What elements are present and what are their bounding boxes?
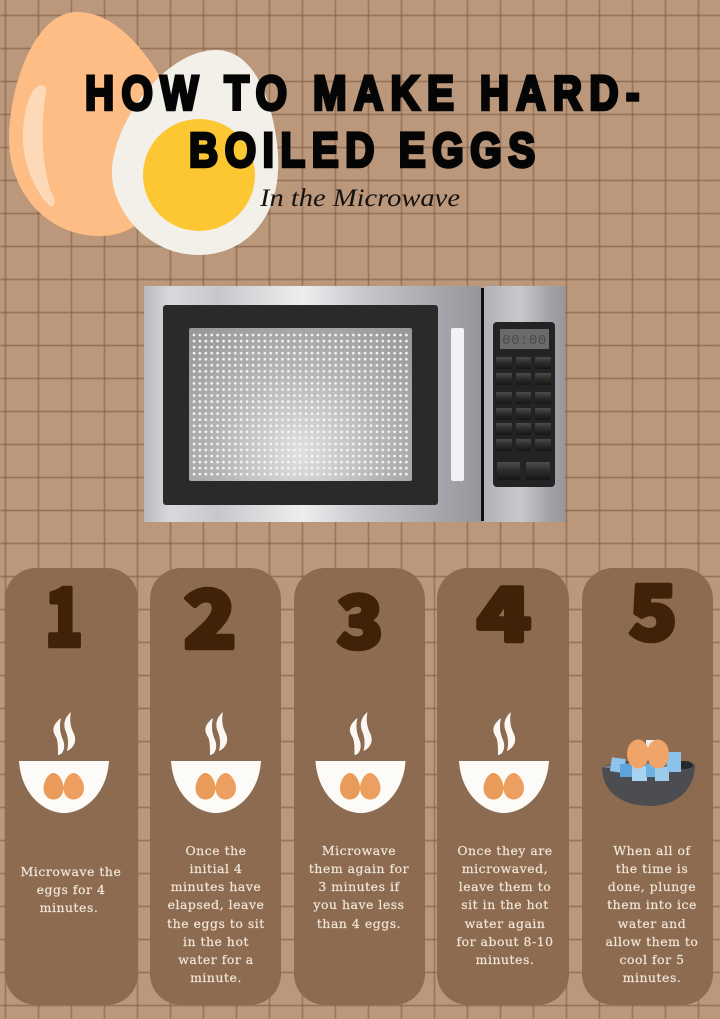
step 2 text: minutes have (171, 879, 261, 894)
step 4 text: Once they are (457, 843, 553, 858)
number 3: 3 (337, 564, 383, 669)
panel: step 4 (437, 556, 569, 1005)
microwave control panel: 00:00 (502, 333, 547, 349)
step 5 text: When all of (613, 843, 692, 858)
step 3 text: them again for (309, 861, 409, 876)
title (85, 67, 639, 177)
microwave door window (163, 305, 438, 505)
panel: step 1 (5, 554, 138, 1005)
step 5 text: allow them to (606, 934, 698, 949)
step 2 text: in the hot (183, 934, 249, 949)
step 5 text: cool for 5 (619, 952, 685, 967)
subtitle: In the Microwave (259, 183, 460, 212)
panel: step 5 (582, 552, 713, 1005)
microwave control panel (493, 322, 555, 487)
step 2 text: elapsed, leave (168, 897, 264, 912)
icon: bowl with eggs (19, 712, 109, 813)
icon: bowl with eggs (316, 712, 406, 813)
step 4 text: sit in the hot (461, 897, 549, 912)
number 5: 5 (629, 552, 677, 662)
step 1 text: eggs for 4 (37, 882, 105, 897)
icon: bowl with eggs (171, 712, 261, 813)
microwave handle (451, 328, 464, 481)
icon: bowl with ice and eggs (602, 740, 695, 806)
step 1 text: Microwave the (21, 864, 121, 879)
number 2: 2 (184, 556, 236, 672)
number 1: 1 (45, 554, 83, 670)
title: BOILED EGGS (189, 124, 535, 177)
step 4 text: leave them to (459, 879, 551, 894)
step 2 text: Once the (185, 843, 247, 858)
step 3 text: you have less (312, 897, 405, 912)
step 5 text: the time is (616, 861, 688, 876)
title: HOW TO MAKE HARD- (85, 67, 639, 120)
icon: whole orange egg (9, 12, 174, 236)
step 3 text: 3 minutes if (318, 879, 400, 894)
number 4: 4 (477, 556, 531, 663)
panel: step 2 (150, 556, 281, 1005)
step 1 text: minutes. (40, 900, 98, 915)
step 2 text: water for a (178, 952, 254, 967)
step 5 text: minutes. (623, 970, 681, 985)
microwave illustration (144, 286, 565, 522)
step 5 text: water and (618, 916, 686, 931)
step 4 text: microwaved, (462, 861, 548, 876)
step 2 text: the eggs to sit (167, 916, 265, 931)
step 5 text: done, plunge (608, 879, 696, 894)
icon: boiled egg half (112, 50, 278, 255)
step 4 text: for about 8-10 (456, 934, 554, 949)
step 4 text: minutes. (476, 952, 534, 967)
step 3 text: than 4 eggs. (317, 916, 401, 931)
panel: step 3 (294, 564, 425, 1005)
step 2 text: minute. (190, 970, 242, 985)
step 5 text: them into ice (607, 897, 697, 912)
step 3 text: Microwave (322, 843, 396, 858)
icon: bowl with eggs (459, 712, 549, 813)
step 2 text: initial 4 (190, 861, 242, 876)
step 4 text: water again (465, 916, 545, 931)
